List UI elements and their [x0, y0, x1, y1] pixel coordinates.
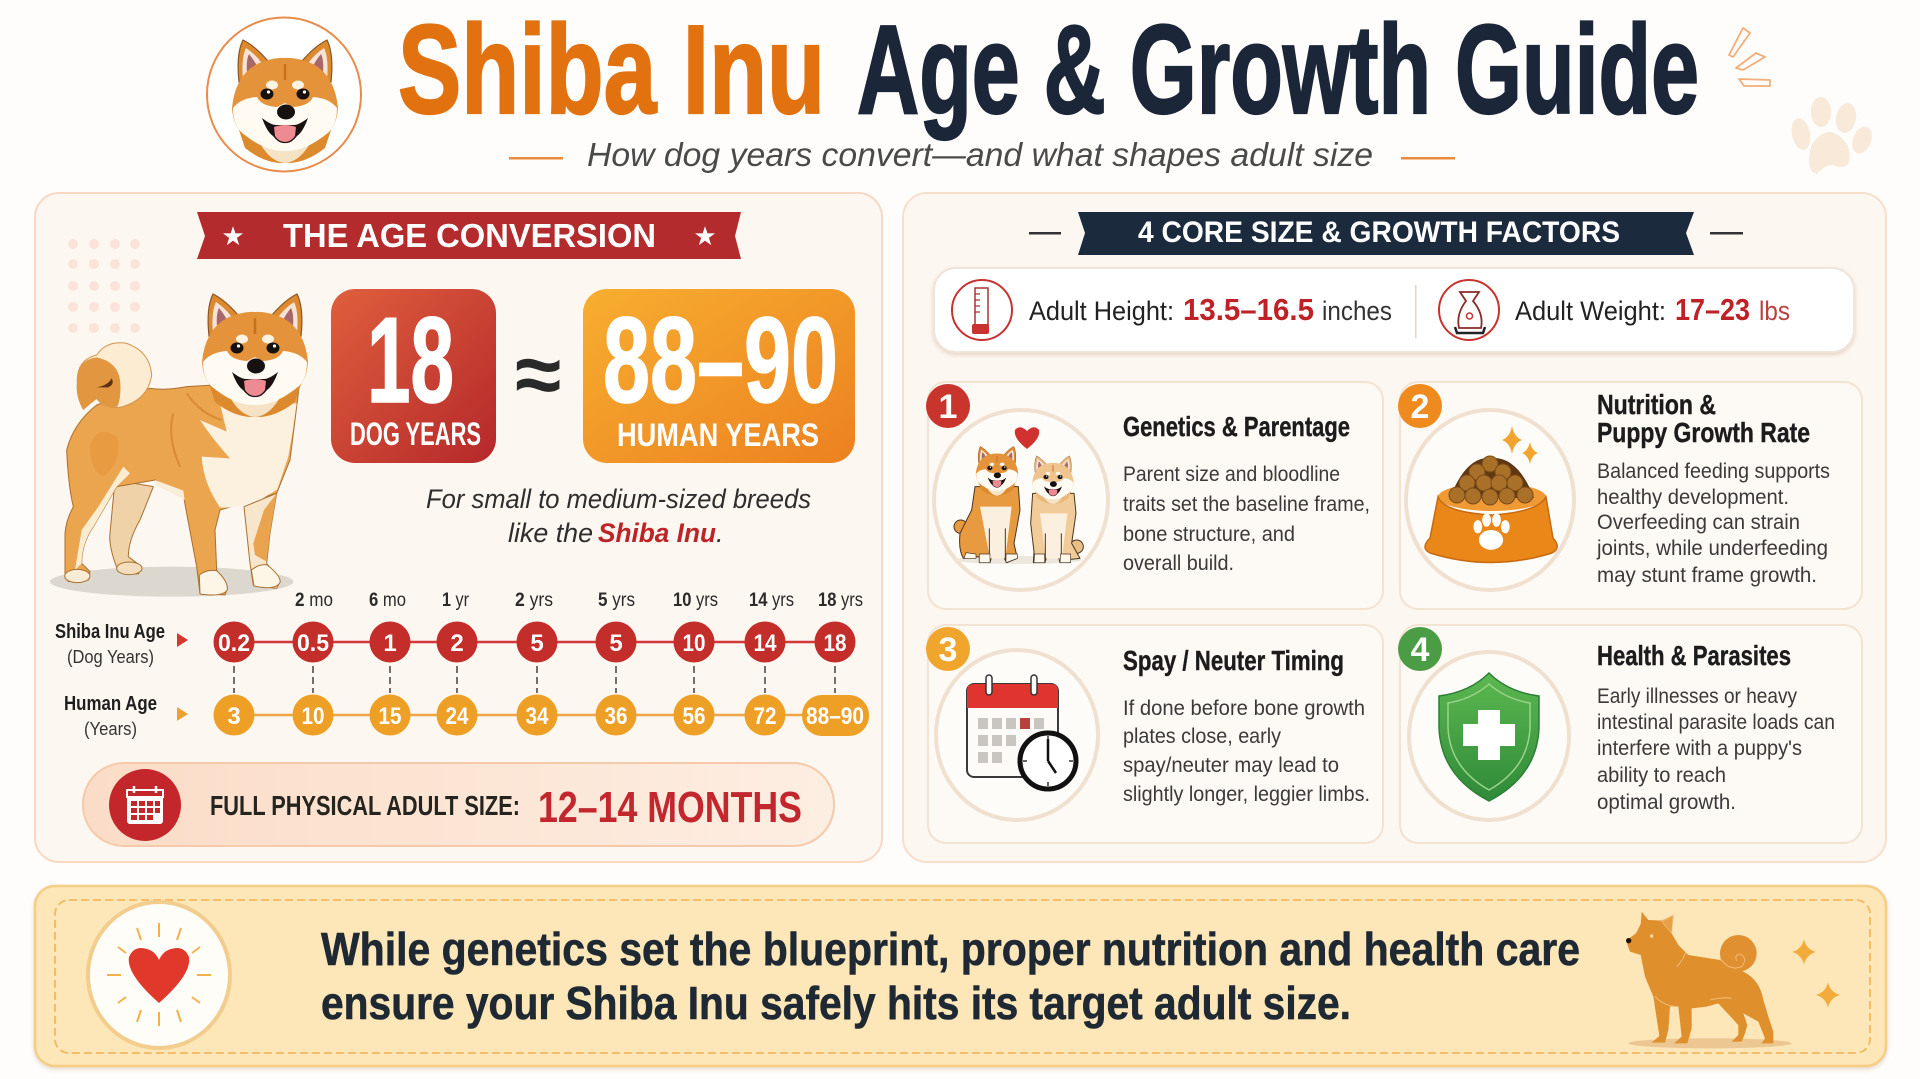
icon: heart with rays: [88, 902, 230, 1048]
body text: joints, while underfeeding: [1596, 537, 1828, 560]
card 3: spay neuter timing: Spay / Neuter Timing: [1123, 645, 1344, 676]
age ticks above timeline: 2 mo: [295, 590, 333, 611]
title: Shiba Inu: [398, 0, 825, 140]
body text: optimal growth.: [1597, 791, 1736, 814]
chart: age timeline: [55, 590, 869, 739]
row: human years: [214, 694, 869, 736]
panel: growth factors: [903, 193, 1886, 862]
icon: two shiba dogs: [934, 410, 1108, 590]
icon: shield with cross: [1409, 652, 1569, 820]
note: breed caption: like the: [508, 518, 593, 548]
row: dog years: 5: [530, 630, 544, 657]
takeaway text: ensure your Shiba Inu safely hits its target adult size.: [321, 977, 1351, 1029]
body text: traits set the baseline frame,: [1123, 493, 1370, 516]
badge: 2: 2: [1411, 388, 1429, 426]
icon: sparkle rays: [1729, 28, 1770, 86]
badge: 3: [926, 627, 970, 671]
header: [207, 0, 1876, 174]
approx symbol: ≈: [515, 327, 561, 421]
stat box: 88-90 human years: 88–90: [603, 292, 838, 428]
body text: spay/neuter may lead to: [1123, 754, 1339, 777]
stat box: 18 dog years: [331, 289, 496, 463]
icon: sparkles: [1792, 939, 1840, 1008]
body text: healthy development.: [1597, 486, 1789, 509]
row: dog years: 0.5: [297, 630, 329, 657]
body text: Early illnesses or heavy: [1597, 685, 1797, 708]
body text: ability to reach: [1597, 764, 1726, 787]
row labels: [55, 621, 188, 739]
logo: shiba head in circle: [207, 18, 361, 172]
badge: 3: 3: [939, 631, 957, 669]
body text: interfere with a puppy's: [1597, 737, 1802, 760]
subtitle: How dog years convert—and what shapes adult size: [587, 136, 1373, 173]
body text: [1597, 685, 1835, 814]
card 2: nutrition: Puppy Growth Rate: [1597, 417, 1810, 448]
body text: If done before bone growth: [1123, 697, 1365, 720]
body text: intestinal parasite loads can: [1597, 711, 1835, 734]
takeaway text: [321, 923, 1580, 1029]
row labels: (Dog Years): [67, 647, 154, 667]
card 1: genetics and parentage: Genetics & Parentage: [1123, 411, 1350, 442]
badge: 2: [1398, 384, 1442, 428]
body text: [1123, 697, 1370, 806]
stats card: adult height and weight: 13.5–16.5: [1183, 292, 1314, 327]
row: dog years: 10: [682, 630, 706, 657]
body text: [1123, 463, 1370, 575]
stats card: adult height and weight: Adult Height:: [1029, 296, 1174, 326]
body text: [1596, 460, 1830, 587]
callout: full physical adult size: [83, 763, 834, 846]
stats card: adult height and weight: inches: [1322, 296, 1392, 326]
icon: calendar and clock: [936, 650, 1098, 820]
row: human years: 15: [378, 703, 402, 730]
icon: weight bag: [1439, 280, 1499, 340]
row labels: (Years): [84, 719, 137, 739]
heading banner: the age conversion: ★: [221, 221, 245, 251]
stats card: adult height and weight: 17–23: [1675, 292, 1750, 327]
card 3: spay neuter timing: [926, 625, 1383, 843]
badge: 1: [926, 384, 970, 428]
title: [398, 0, 1699, 140]
row: dog years: 1: [383, 630, 397, 657]
row: human years: 56: [682, 703, 706, 730]
heading banner: 4 core factors: [1029, 212, 1743, 255]
connector lines: [234, 642, 835, 715]
badge: 4: 4: [1411, 631, 1430, 669]
heading banner: 4 core factors: 4 CORE SIZE & GROWTH FACTORS: [1138, 216, 1620, 249]
bottom banner: key takeaway: [35, 886, 1886, 1066]
icon: shiba silhouette: [1626, 912, 1792, 1048]
badge: 1: 1: [939, 388, 957, 426]
age ticks above timeline: 6 mo: [369, 590, 406, 611]
body text: overall build.: [1123, 552, 1234, 575]
icon: calendar: [109, 769, 181, 841]
row: dog years: 2: [450, 630, 464, 657]
row: human years: 3: [227, 703, 241, 730]
stats card: adult height and weight: Adult Weight:: [1515, 296, 1666, 326]
body text: bone structure, and: [1123, 523, 1295, 546]
row: dog years: 5: [609, 630, 623, 657]
row: human years: 10: [302, 703, 324, 730]
takeaway text: While genetics set the blueprint, proper nutrition and health care: [321, 923, 1580, 975]
note: breed caption: [426, 484, 811, 548]
illustration: standing shiba inu: [50, 294, 308, 597]
callout: full physical adult size: FULL PHYSICAL ADULT SIZE:: [210, 790, 520, 821]
age ticks above timeline: [295, 590, 863, 611]
stats card: adult height and weight: [934, 268, 1854, 352]
row: dog years: [214, 622, 856, 662]
card 1: genetics and parentage: [926, 382, 1383, 609]
heading banner: the age conversion: ★: [693, 221, 717, 251]
row: dog years: 0.2: [218, 630, 250, 657]
decorative dots: [68, 239, 140, 333]
stats card: adult height and weight: lbs: [1759, 296, 1790, 326]
age ticks above timeline: 10 yrs: [673, 590, 718, 611]
card 2: nutrition: Nutrition &: [1597, 389, 1716, 420]
panel: age conversion: [35, 193, 882, 862]
row: human years: 36: [604, 703, 628, 730]
row: human years: 88–90: [806, 703, 864, 730]
row: dog years: 14: [754, 630, 777, 657]
body text: Parent size and bloodline: [1123, 463, 1340, 486]
icon: height ruler: [952, 280, 1012, 340]
stat box: 88-90 human years: [583, 289, 855, 463]
note: breed caption: .: [716, 518, 724, 548]
row: human years: 34: [526, 703, 549, 730]
row labels: Shiba Inu Age: [55, 621, 165, 643]
stat box: 18 dog years: 18: [367, 292, 454, 428]
body text: Balanced feeding supports: [1597, 460, 1830, 483]
age ticks above timeline: 14 yrs: [749, 590, 794, 611]
card 4: health and parasites: Health & Parasites: [1597, 640, 1791, 671]
body text: plates close, early: [1123, 725, 1281, 748]
age ticks above timeline: 2 yrs: [515, 590, 553, 611]
age ticks above timeline: 5 yrs: [598, 590, 635, 611]
card 4: health and parasites: [1398, 625, 1862, 843]
badge: 4: [1398, 627, 1442, 671]
age ticks above timeline: 18 yrs: [818, 590, 863, 611]
body text: Overfeeding can strain: [1597, 511, 1800, 534]
card 2: nutrition: [1398, 382, 1862, 609]
body text: slightly longer, leggier limbs.: [1123, 783, 1370, 806]
stat box: 18 dog years: DOG YEARS: [350, 416, 481, 452]
body text: may stunt frame growth.: [1597, 564, 1817, 587]
icon: paw print: [1789, 97, 1876, 174]
age ticks above timeline: 1 yr: [442, 590, 470, 611]
row: human years: 72: [754, 703, 776, 730]
icon: food bowl: [1406, 410, 1574, 590]
callout: full physical adult size: 12–14 MONTHS: [538, 783, 802, 832]
stat box: 88-90 human years: HUMAN YEARS: [617, 417, 819, 453]
row labels: Human Age: [64, 693, 157, 715]
note: breed caption: For small to medium-sized breeds: [426, 484, 811, 514]
heading banner: the age conversion: THE AGE CONVERSION: [283, 217, 656, 254]
heading banner: the age conversion: [197, 212, 741, 259]
note: breed caption: Shiba Inu: [598, 518, 716, 548]
row: human years: 24: [446, 703, 469, 730]
row: dog years: 18: [824, 630, 846, 657]
